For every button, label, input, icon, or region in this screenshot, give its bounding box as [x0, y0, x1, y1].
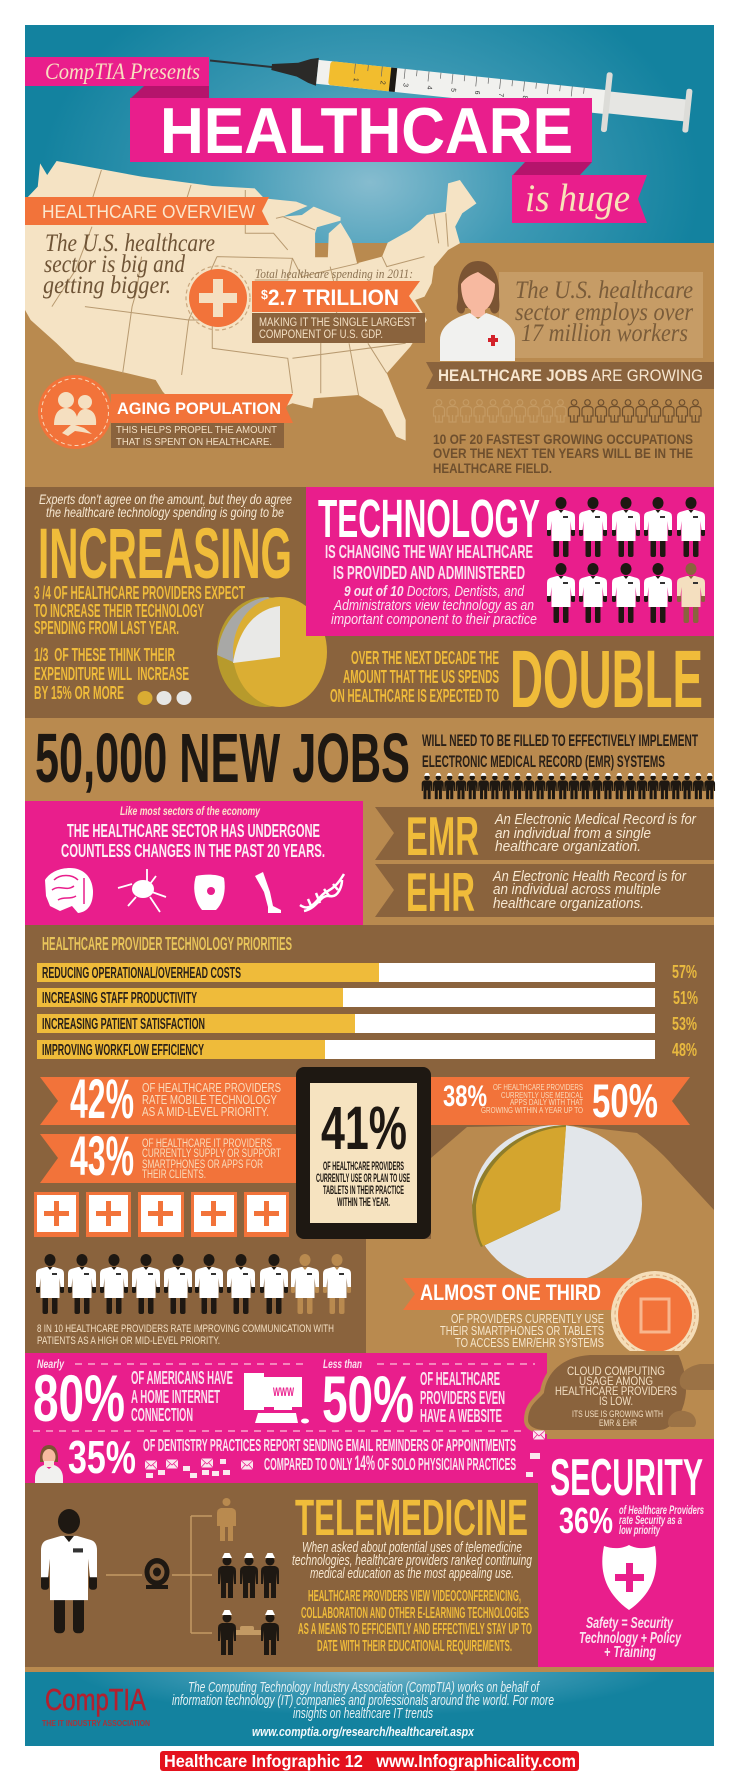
panel: telemedicine [25, 1483, 538, 1667]
banner: 38 to 50 percent: 38% [443, 1080, 487, 1113]
text: low priority: rate Security as a [619, 1515, 682, 1527]
text: access EMR EHR [440, 1312, 604, 1350]
bar: workflow efficiency 48%: 48% [672, 1040, 697, 1060]
stat: 80 percent home internet [33, 1357, 233, 1435]
text: employs 17 million workers: 17 million workers [521, 320, 688, 347]
text: next decade spend: AMOUNT THAT THE US SPENDS [343, 666, 499, 687]
text: experts do not agree: the healthcare technology spending is going to be [46, 504, 284, 520]
panel: technology [306, 487, 714, 636]
panel: EMR definition: EMR [406, 805, 479, 867]
text: experts do not agree [39, 491, 292, 520]
banner: 43 percent IT providers: OF HEALTHCARE IT PROVIDERS [142, 1138, 272, 1150]
icons: three colleagues [218, 1553, 279, 1598]
subheading: IS PROVIDED AND ADMINISTERED [333, 563, 525, 583]
text: EHR definition: an individual across multiple [493, 881, 661, 898]
stat: 80 percent home internet: 80% [33, 1361, 125, 1435]
needle [210, 60, 278, 69]
text: access EMR EHR: THEIR SMARTPHONES OR TABLETS [440, 1324, 604, 1338]
text box: aging population detail: THAT IS SPENT ON HEALTHCARE. [116, 436, 272, 448]
heading: TELEMEDICINE: TELEMEDICINE [295, 1489, 528, 1546]
banner fold [131, 86, 209, 98]
text: one third of these: 1/3 OF THESE THINK THEIR [34, 645, 175, 665]
icon: pelvis [194, 875, 225, 910]
icon: molecule body [118, 869, 166, 912]
dashed dividers [33, 1364, 535, 1431]
icon: tablet with 41 percent: 41% [321, 1094, 407, 1162]
stat: 35 percent dentistry: COMPARED TO ONLY 14% OF SOLO PHYSICIAN PRACTICES [264, 1452, 516, 1475]
text: access EMR EHR: OF PROVIDERS CURRENTLY USE [451, 1312, 604, 1326]
banner: 2.7 trillion: $ [261, 287, 269, 302]
pie chart: three quarters [217, 597, 327, 707]
heading: THE HEALTHCARE SECTOR HAS UNDERGONE [67, 820, 320, 841]
text box: largest component of GDP: MAKING IT THE SINGLE LARGEST [259, 317, 416, 329]
piston ring [389, 67, 397, 92]
icon row: workers [422, 773, 715, 799]
icon: brain scan [45, 868, 93, 913]
heading: TECHNOLOGY: TECHNOLOGY [318, 489, 540, 549]
text: next decade spend: ON HEALTHCARE IS EXPECTED TO [330, 685, 499, 706]
banner: 42 percent mobile: AS A MID-LEVEL PRIORITY. [142, 1105, 269, 1119]
logo: CompTIA: THE IT INDUSTRY ASSOCIATION [42, 1718, 150, 1728]
icon: tablet with 41 percent [296, 1067, 431, 1239]
needle hub [270, 53, 319, 86]
bar: staff productivity 51%: 51% [673, 988, 698, 1008]
text: three quarters of providers: SPENDING FROM LAST YEAR. [34, 618, 179, 638]
stat: 36 percent: 36% [559, 1500, 613, 1541]
text: three quarters of providers [34, 583, 245, 638]
banner: 38 to 50 percent: CURRENTLY USE MEDICAL [501, 1091, 583, 1100]
text: total healthcare spending: Total healthcare spending in 2011: [255, 266, 413, 281]
heading [61, 820, 325, 861]
bar: staff productivity 51%: INCREASING STAFF PRODUCTIVITY [42, 990, 197, 1007]
panel: top teal header [25, 25, 714, 250]
banner: 2.7 trillion: 2.7 TRILLION [268, 285, 399, 310]
text: nine out of ten: 9 out of 10 Doctors, Dentists, and [344, 583, 525, 600]
banner: healthcare overview: HEALTHCARE OVERVIEW [42, 202, 255, 222]
text: one third of these: EXPENDITURE WILL INCREASE [34, 664, 189, 684]
text: cloud usage: USAGE AMONG [579, 1374, 653, 1388]
text: low priority: low priority [619, 1525, 660, 1537]
banner: 43 percent IT providers: SMARTPHONES OR APPS FOR [142, 1159, 263, 1171]
bar: patient satisfaction 53%: INCREASING PATIENT SATISFACTION [42, 1016, 205, 1033]
icon: prosthetic leg [255, 872, 281, 913]
bar chart: technology priorities [37, 962, 698, 1060]
bar: reducing costs 57%: 57% [672, 962, 697, 982]
banner: 43 percent IT providers: THEIR CLIENTS. [142, 1169, 206, 1181]
text: cloud usage [555, 1364, 677, 1428]
banner: 42 percent mobile: RATE MOBILE TECHNOLOGY [142, 1093, 278, 1107]
bar: reducing costs 57%: REDUCING OPERATIONAL/OVERHEAD COSTS [42, 965, 241, 982]
bar: patient satisfaction 53%: 53% [672, 1014, 697, 1034]
barrel flange [601, 72, 613, 132]
banner: 42 percent mobile [40, 1067, 297, 1130]
banner: almost one third [403, 1278, 630, 1310]
text: communication priority: 8 IN 10 HEALTHCARE PROVIDERS RATE IMPROVING COMMUNICATION WITH [37, 1323, 334, 1335]
banner: 38 to 50 percent [431, 1074, 690, 1127]
cloud shape [526, 1353, 688, 1432]
text: cloud usage: CLOUD COMPUTING [567, 1364, 665, 1378]
text: tablet use: TABLETS IN THEIR PRACTICE [323, 1183, 404, 1197]
text: cloud usage: HEALTHCARE PROVIDERS [555, 1384, 677, 1398]
banner: jobs are growing: HEALTHCARE JOBS ARE GROWING [438, 366, 703, 385]
ruler ticks and numbers: 3 [401, 83, 409, 87]
text: website: www.comptia.org/research/healthcareit.aspx [252, 1724, 475, 1739]
map of the United States [25, 161, 476, 441]
text: fastest growing occupations [433, 432, 693, 476]
panel: priorities and mobile background [25, 925, 714, 1355]
icon: computer: WWW [273, 1385, 294, 1399]
banner: 38 to 50 percent: 50% [592, 1074, 658, 1127]
banner: 43 percent IT providers [40, 1124, 297, 1187]
bar: workflow efficiency 48% [37, 1040, 697, 1060]
banner: CompTIA Presents: CompTIA Presents [45, 59, 200, 84]
stat: 35 percent dentistry: 35% [68, 1431, 136, 1483]
banner: almost one third: ALMOST ONE THIRD [420, 1280, 601, 1305]
icons: two carers with stretcher [218, 1610, 279, 1655]
banner: aging population: AGING POPULATION [117, 399, 281, 418]
banner: 38 to 50 percent: APPS DAILY WITH THAT [510, 1098, 583, 1107]
panel: EHR definition [375, 861, 714, 923]
ruler ticks and numbers: 6 [473, 90, 480, 95]
barrel [316, 60, 609, 114]
body [440, 313, 515, 361]
stat: 50 percent website: 50% [322, 1362, 414, 1436]
text: about CompTIA: insights on healthcare IT trends [293, 1706, 433, 1722]
face [461, 272, 495, 312]
text: sector is big and getting bigger: The U.S. healthcare [45, 230, 215, 257]
panel: security [538, 1439, 714, 1667]
stat: 80 percent home internet: CONNECTION [131, 1405, 193, 1425]
text: employs 17 million workers [515, 277, 693, 347]
logo: CompTIA: CompTIA [45, 1682, 146, 1717]
text: EMR definition: an individual from a single [495, 825, 651, 842]
text: EHR definition: healthcare organizations. [493, 895, 644, 912]
panel: footer [25, 1672, 714, 1746]
text: about CompTIA [172, 1680, 554, 1722]
bar: workflow efficiency 48%: IMPROVING WORKFLOW EFFICIENCY [42, 1042, 204, 1059]
panel: EHR definition: EHR [406, 861, 475, 923]
text: cloud usage: EMR & EHR [599, 1418, 637, 1428]
text: potential uses: When asked about potential uses of telemedicine [302, 1539, 522, 1556]
stat: 50 percent website: Less than [323, 1357, 362, 1371]
heading: priorities: HEALTHCARE PROVIDER TECHNOLOGY PRIORITIES [42, 934, 292, 954]
text: potential uses: medical education as the most appealing use. [310, 1565, 514, 1582]
banner: healthcare overview [25, 197, 269, 225]
text: about CompTIA: information technology (IT) companies and professionals around the world. For more [172, 1693, 554, 1709]
text: cloud usage: ITS USE IS GROWING WITH [572, 1409, 663, 1419]
heading: 50,000 new jobs: 50,000 NEW JOBS [35, 719, 410, 797]
pie chart: almost one third [472, 1125, 642, 1283]
text: tablet use: WITHIN THE YEAR. [337, 1195, 390, 1209]
text: fastest growing occupations: 10 OF 20 FASTEST GROWING OCCUPATIONS [433, 432, 693, 447]
plunger rod [607, 91, 687, 121]
ruler ticks and numbers [352, 64, 584, 106]
stat: 50 percent website: OF HEALTHCARE [420, 1369, 500, 1389]
small clouds [668, 1364, 714, 1427]
ruler ticks and numbers: 1 [352, 77, 359, 82]
text: videoconferencing [298, 1588, 532, 1655]
text: safety equals security: Safety = Security [586, 1615, 674, 1632]
connector lines [106, 1516, 212, 1633]
kicker: Like most sectors of the economy [120, 804, 261, 818]
stat: 80 percent home internet: A HOME INTERNET [131, 1387, 220, 1407]
ruler ticks and numbers: 8 [521, 95, 528, 100]
text box: aging population detail [111, 423, 284, 448]
text box: largest component of GDP: COMPONENT OF U.S. GDP. [259, 329, 383, 341]
heading: INCREASING: INCREASING [38, 515, 292, 594]
banner: 43 percent IT providers: 43% [70, 1124, 134, 1187]
text: potential uses: technologies, healthcare providers ranked continuing [292, 1552, 532, 1569]
ruler ticks and numbers: 5 [449, 88, 456, 92]
icon: tablet with 41 percent: OF HEALTHCARE PROVIDERS [323, 1159, 404, 1173]
text: about CompTIA: The Computing Technology Industry Association (CompTIA) works on behalf of [188, 1680, 540, 1696]
hair [457, 261, 499, 314]
text: tablet use [316, 1159, 410, 1209]
icons: flying envelopes [145, 1430, 545, 1478]
bar: patient satisfaction 53% [37, 1014, 697, 1034]
banner: 38 to 50 percent: OF HEALTHCARE PROVIDERS [493, 1083, 583, 1092]
red cross [488, 335, 498, 346]
subheading: IS CHANGING THE WAY HEALTHCARE [325, 542, 533, 562]
text: access EMR EHR: TO ACCESS EMR/EHR SYSTEMS [455, 1336, 604, 1350]
syringe [207, 31, 693, 141]
text: sector is big and getting bigger: sector is big and [44, 251, 185, 278]
panel: internet stats pink [25, 1353, 555, 1483]
bar: reducing costs 57% [37, 962, 697, 982]
ruler ticks and numbers: 4 [425, 85, 433, 90]
figures [54, 392, 96, 436]
text: sector is big and getting bigger [43, 230, 215, 299]
subheading [325, 542, 533, 583]
panel: new jobs background [25, 718, 714, 925]
stat: 80 percent home internet: OF AMERICANS HAVE [131, 1368, 233, 1388]
text: next decade spend: OVER THE NEXT DECADE THE [351, 647, 499, 668]
neck [471, 305, 485, 317]
panel: countless changes [25, 801, 363, 925]
stat: 50 percent website: PROVIDERS EVEN [420, 1388, 505, 1408]
text: one third of these: BY 15% OR MORE [34, 683, 124, 703]
bar: staff productivity 51% [37, 988, 698, 1008]
banner: jobs are growing [426, 362, 714, 389]
icon: nurse [440, 261, 515, 361]
icon: computer [244, 1373, 309, 1424]
logo: CompTIA [42, 1682, 150, 1728]
text: EMR definition: healthcare organization. [495, 838, 641, 855]
text: nine out of ten [331, 583, 537, 628]
icon row: plus cards [34, 1192, 289, 1237]
stat: 35 percent dentistry [68, 1431, 516, 1483]
icon: webcam [144, 1558, 170, 1589]
text: communication priority [37, 1323, 334, 1347]
dots: one in three [138, 691, 192, 705]
text: EMR definition [494, 811, 697, 855]
text: three quarters of providers: TO INCREASE THEIR TECHNOLOGY [34, 601, 204, 621]
stat: 80 percent home internet: Nearly [37, 1357, 65, 1371]
panel: technology spending background [25, 487, 714, 718]
icon: plus medallion [186, 266, 250, 330]
banner: 38 to 50 percent: GROWING WITHIN A YEAR UP TO [481, 1106, 583, 1115]
text: sector is big and getting bigger: getting bigger. [43, 272, 171, 299]
fluid [328, 61, 392, 91]
icon: small nurse [35, 1445, 63, 1483]
icon: single patient [217, 1498, 236, 1541]
text: low priority [619, 1505, 704, 1537]
tan backdrop behind pie [366, 1125, 714, 1353]
icon: large doctor [41, 1509, 97, 1633]
banner: 42 percent mobile: OF HEALTHCARE PROVIDERS [142, 1081, 281, 1095]
text: communication priority: PATIENTS AS A HIGH OR MID-LEVEL PRIORITY. [37, 1335, 220, 1347]
icon: tablet with 41 percent: CURRENTLY USE OR PLAN TO USE [316, 1171, 410, 1185]
plunger end [682, 88, 693, 133]
banner fold [513, 162, 592, 175]
panel: tan overview background [25, 243, 714, 488]
icon: shield [602, 1545, 656, 1610]
stat: 50 percent website [322, 1357, 505, 1436]
text: employs 17 million workers: sector employs over [515, 299, 693, 326]
tan strip [25, 1667, 714, 1672]
banner: is huge: is huge [525, 177, 630, 220]
text: experts do not agree: Experts don't agree on the amount, but they do agree [39, 491, 292, 507]
heading: COUNTLESS CHANGES IN THE PAST 20 YEARS. [61, 840, 325, 861]
text: fastest growing occupations: HEALTHCARE FIELD. [433, 461, 552, 476]
text: safety equals security: + Training [604, 1644, 656, 1661]
text: fastest growing occupations: OVER THE NEXT TEN YEARS WILL BE IN THE [433, 446, 693, 461]
icon row: ten doctors eight highlighted [36, 1254, 351, 1314]
text box: aging population detail: THIS HELPS PROPEL THE AMOUNT [116, 424, 278, 436]
text: three quarters of providers: 3 /4 OF HEALTHCARE PROVIDERS EXPECT [34, 583, 245, 603]
banner: 43 percent IT providers: CURRENTLY SUPPLY OR SUPPORT [142, 1148, 281, 1160]
text: videoconferencing: HEALTHCARE PROVIDERS VIEW VIDEOCONFERENCING, [308, 1588, 521, 1605]
text: safety equals security: Technology + Policy [579, 1630, 682, 1647]
text: nine out of ten: Administrators view technology as an [333, 597, 534, 614]
banner: aging population [111, 394, 293, 423]
banner: 42 percent mobile: 42% [70, 1067, 134, 1130]
text: EHR definition [492, 868, 687, 912]
icon row: 20 people [434, 400, 701, 422]
title: HEALTHCARE: HEALTHCARE [160, 94, 573, 167]
panel: EMR definition [375, 805, 714, 867]
text: nine out of ten: important component to their practice [331, 611, 537, 628]
caption bar: Healthcare Infographic 12 www.Infographicality.com [164, 1751, 576, 1771]
banner: 2.7 trillion [252, 281, 420, 312]
light box behind workers text [499, 272, 703, 358]
text: videoconferencing: DATE WITH THEIR EDUCATIONAL REQUIREMENTS. [317, 1638, 512, 1655]
text: next decade spend [330, 647, 499, 706]
text: EMR jobs [422, 731, 698, 771]
icon: tablet medallion [611, 1271, 699, 1359]
text: cloud usage: IS LOW. [599, 1394, 633, 1408]
panel: cloud computing [526, 1353, 714, 1443]
icon: aging population medallion [38, 375, 112, 449]
icon: DNA helix [300, 874, 344, 911]
ruler ticks and numbers: 2 [378, 80, 386, 85]
text box: largest component of GDP [252, 313, 425, 343]
text: one third of these [34, 645, 189, 703]
text: EHR definition: An Electronic Health Record is for [492, 868, 687, 885]
text: safety equals security [579, 1615, 682, 1661]
ruler ticks and numbers: 7 [497, 93, 504, 97]
text: EMR definition: An Electronic Medical Record is for [494, 811, 697, 828]
stat: 50 percent website: HAVE A WEBSITE [420, 1406, 502, 1426]
text: employs 17 million workers: The U.S. healthcare [515, 277, 693, 304]
text: potential uses [292, 1539, 532, 1582]
icon grid: ten doctors [547, 497, 705, 623]
